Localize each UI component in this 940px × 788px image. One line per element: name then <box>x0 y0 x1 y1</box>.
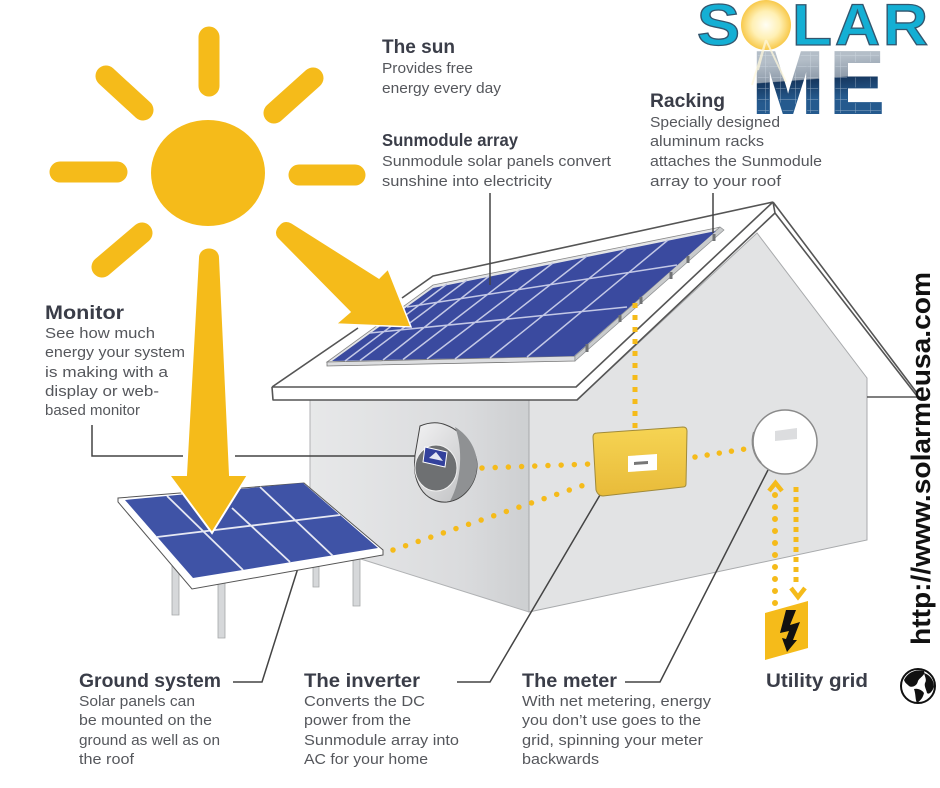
text: ground system <box>79 671 221 768</box>
text: monitor: energy your system <box>45 344 185 361</box>
roof <box>272 202 917 400</box>
panel surface <box>125 483 378 578</box>
logo word ME: E <box>830 33 884 132</box>
text: the meter: With net metering, energy <box>522 693 712 710</box>
text: monitor <box>45 303 185 419</box>
text: the meter: you don’t use goes to the <box>522 712 701 729</box>
logo word ME <box>752 33 884 132</box>
utility grid icon <box>765 601 808 660</box>
meter <box>753 410 817 474</box>
text: sunmodule array: Sunmodule solar panels convert <box>382 153 612 170</box>
text: the sun: energy every day <box>382 80 502 97</box>
text: monitor: Monitor <box>45 303 125 324</box>
text: racking: Racking <box>650 91 725 112</box>
solar array on roof <box>327 227 724 366</box>
logo word ME: E <box>830 33 884 132</box>
logo word SOLAR <box>697 0 928 58</box>
text: the sun: Provides free <box>382 60 473 77</box>
text: monitor: is making with a <box>45 364 169 381</box>
text: monitor: display or web- <box>45 383 159 400</box>
text: the sun <box>382 37 502 97</box>
text: racking: aluminum racks <box>650 133 764 150</box>
ground panel system <box>118 483 383 638</box>
sun <box>60 37 355 267</box>
text: monitor: based monitor <box>45 403 140 419</box>
icon: globe <box>901 669 935 703</box>
arrow to ground panel <box>169 248 248 533</box>
text: sunmodule array <box>382 130 612 190</box>
text: the meter: The meter <box>522 671 618 692</box>
text: racking: Specially designed <box>650 114 780 131</box>
text: ground system: ground as well as on <box>79 732 220 749</box>
logo sun <box>741 0 791 85</box>
right gable wall <box>529 233 867 612</box>
text: the meter: grid, spinning your meter <box>522 732 703 749</box>
website url: http://www.solarmeusa.com <box>906 272 936 645</box>
text: sunmodule array: Sunmodule array <box>382 130 518 150</box>
text: ground system: the roof <box>79 751 135 768</box>
text: monitor: See how much <box>45 325 155 342</box>
dotted power flow lines <box>393 303 805 604</box>
inverter <box>593 427 687 496</box>
legs <box>172 555 360 638</box>
text: the inverter <box>304 671 459 768</box>
text: ground system: Solar panels can <box>79 693 195 710</box>
text: the meter <box>522 671 712 768</box>
frame <box>118 483 383 589</box>
arrow to roof <box>275 221 411 327</box>
text: the inverter: The inverter <box>304 671 421 692</box>
logo word ME: M <box>752 33 824 132</box>
text: racking: array to your roof <box>650 173 782 190</box>
text: the inverter: AC for your home <box>304 751 428 768</box>
logo word ME: M <box>752 33 824 132</box>
text: ground system: be mounted on the <box>79 712 212 729</box>
text: the meter: backwards <box>522 751 599 768</box>
left wall <box>310 400 529 612</box>
text: the inverter: Converts the DC <box>304 693 425 710</box>
leader lines <box>92 193 768 682</box>
text: racking <box>650 91 822 190</box>
monitor device <box>415 423 477 502</box>
text: the inverter: power from the <box>304 712 411 729</box>
text: utility grid: Utility grid <box>766 671 868 692</box>
text: sunmodule array: sunshine into electricity <box>382 173 553 190</box>
text: the inverter: Sunmodule array into <box>304 732 459 749</box>
house <box>272 202 917 612</box>
text: the sun: The sun <box>382 37 455 58</box>
text: racking: attaches the Sunmodule <box>650 153 822 170</box>
logo: Solar Me <box>697 0 928 132</box>
text: ground system: Ground system <box>79 671 221 692</box>
